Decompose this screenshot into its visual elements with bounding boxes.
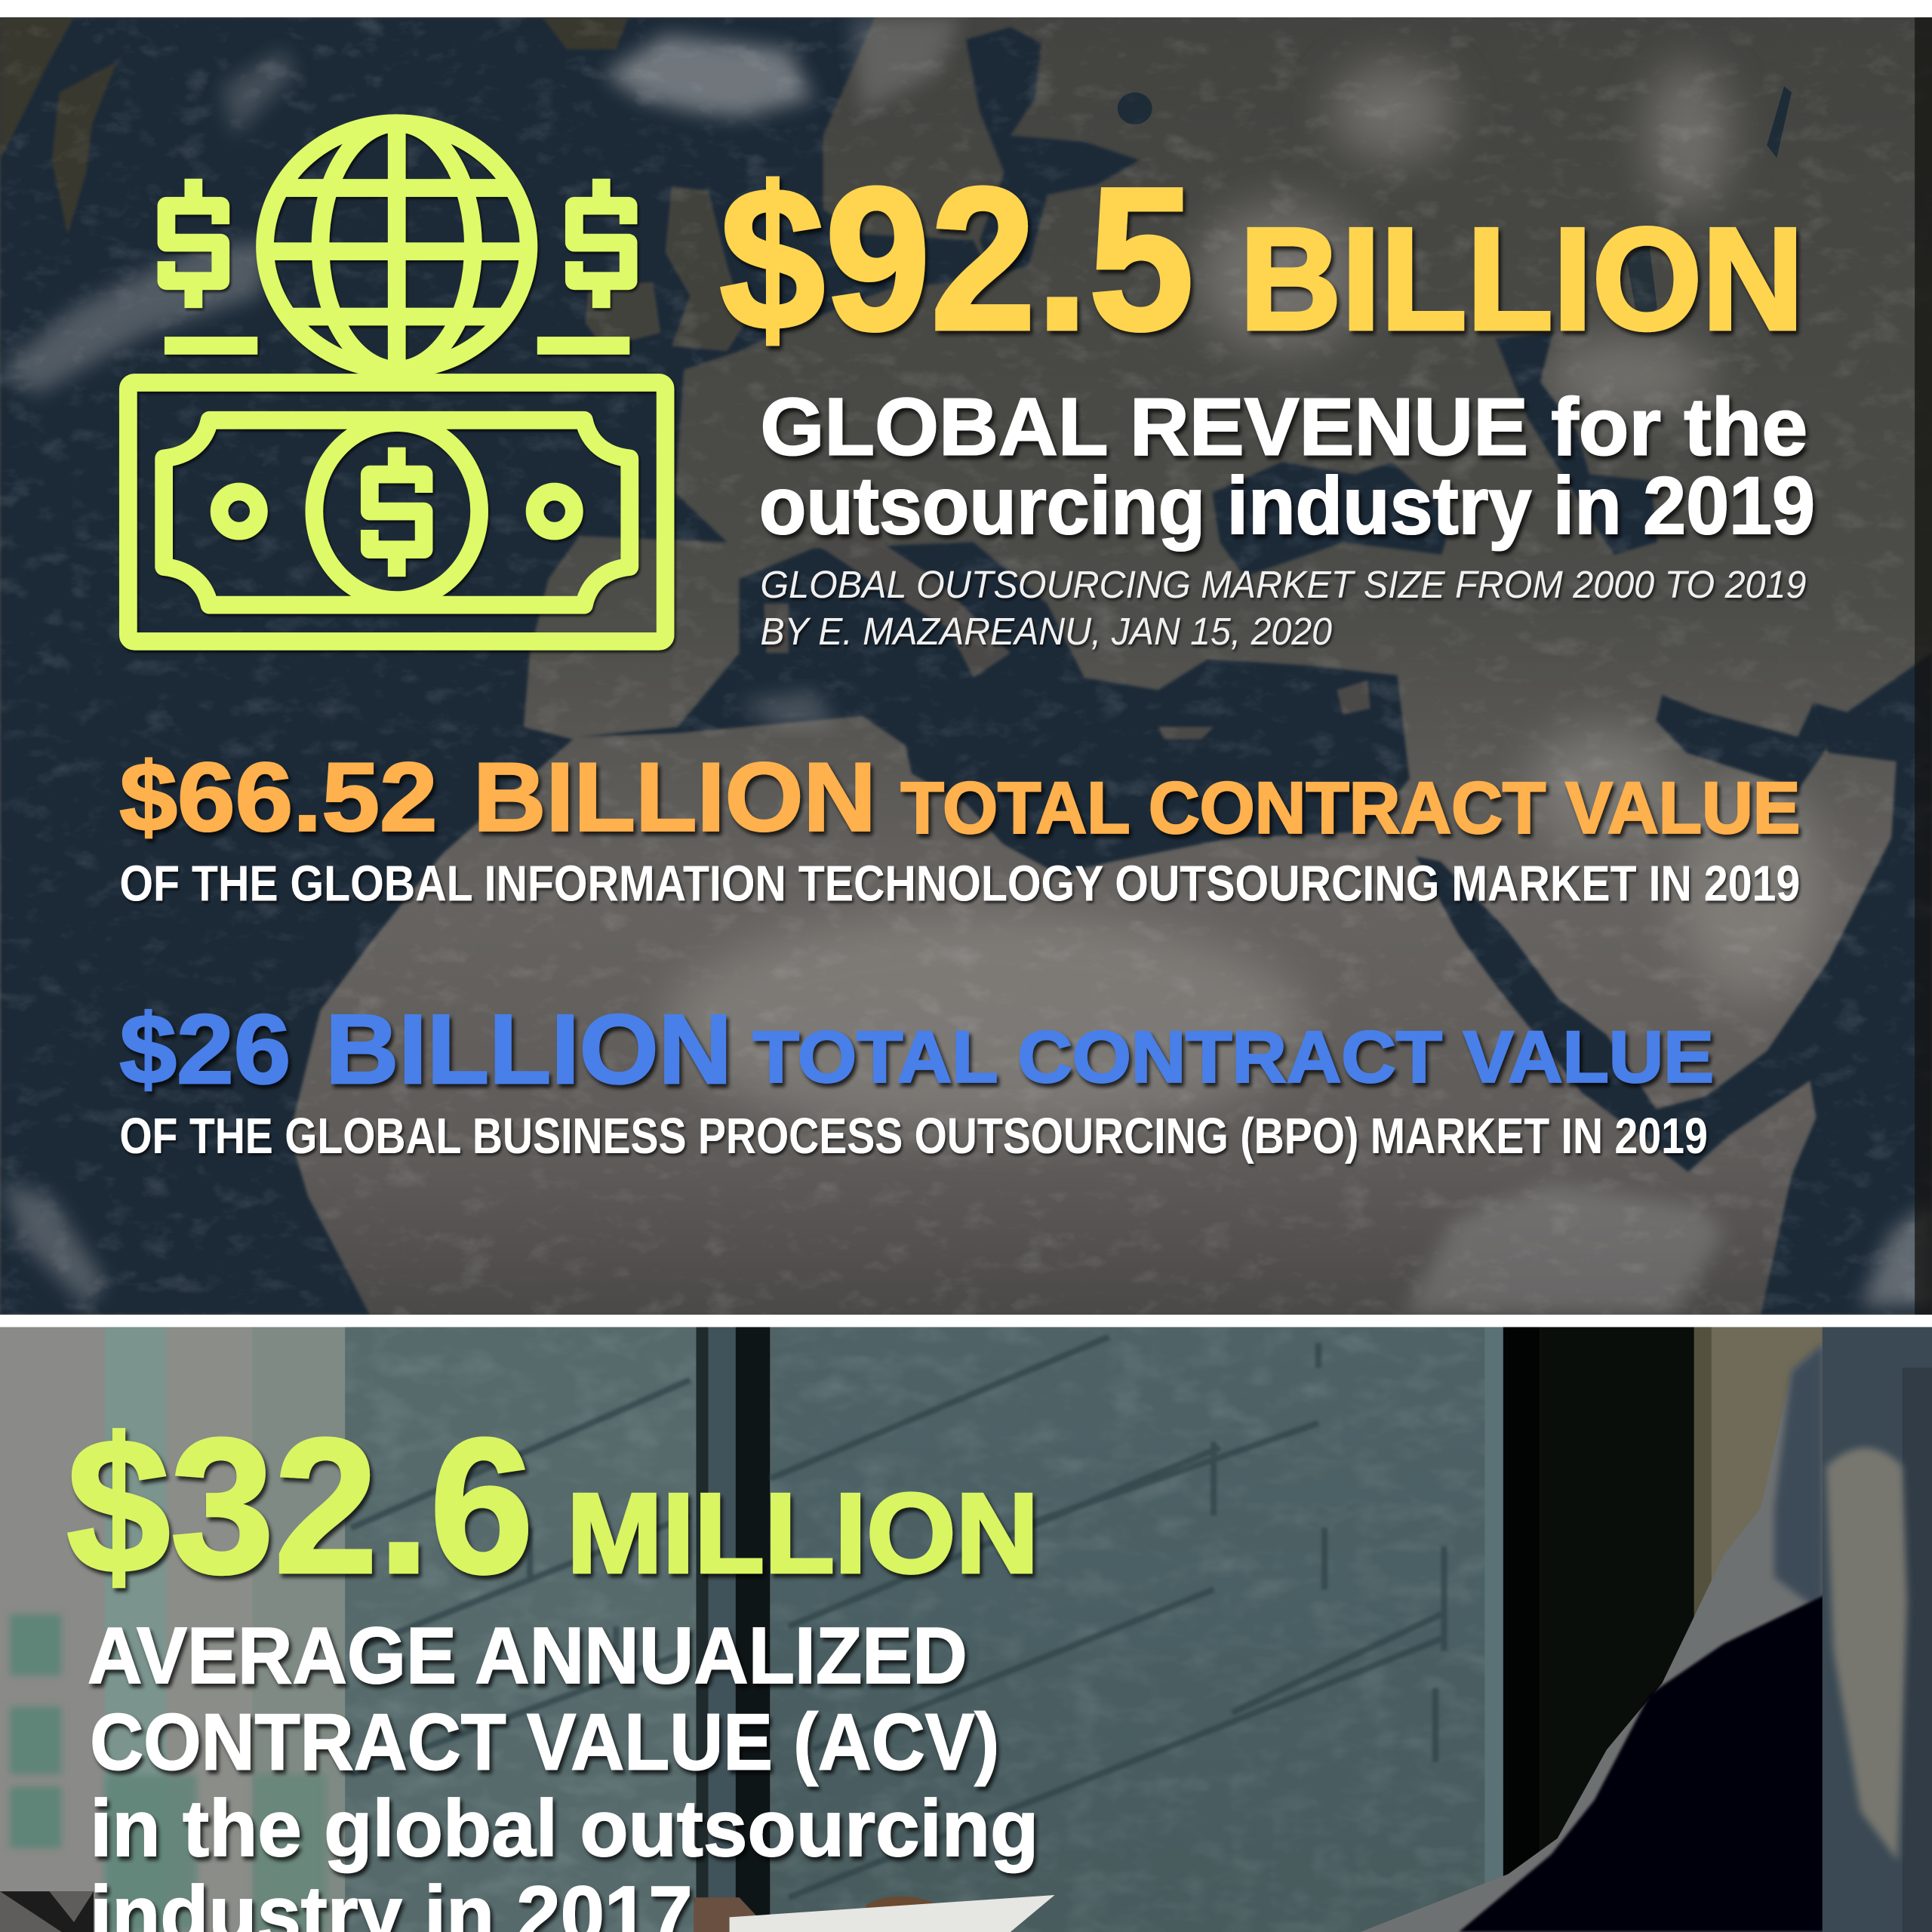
sea: Black Sea bbox=[1213, 462, 1453, 577]
sea: Baltic bbox=[966, 27, 1140, 277]
stat: 66.52 billion: TOTAL CONTRACT VALUE bbox=[900, 768, 1800, 849]
stat: 26 billion: TOTAL CONTRACT VALUE bbox=[753, 1017, 1714, 1097]
stat: 26 billion: BILLION bbox=[325, 994, 732, 1104]
sea: Indian Ocean and Red Sea bbox=[1416, 653, 1932, 1315]
text: global revenue description: GLOBAL REVENUE for the bbox=[760, 380, 1807, 472]
icon part: dashes bbox=[165, 340, 629, 351]
sea: Mediterranean bbox=[579, 542, 1410, 875]
land: Iceland and Greenland fragments bbox=[0, 17, 629, 234]
stat: 66.52 billion bbox=[119, 743, 1800, 851]
text: global revenue description bbox=[759, 380, 1815, 551]
icon part: banknote bbox=[164, 420, 629, 605]
icon part: outer note frame bbox=[128, 383, 666, 641]
panel: average contract value bbox=[0, 1327, 1932, 1932]
background: satellite map bbox=[0, 17, 1932, 1315]
brick courses bbox=[351, 1337, 1444, 1897]
stat: 32.6 million: MILLION bbox=[567, 1469, 1038, 1596]
icon: globe over banknote with dollar signs bbox=[128, 115, 666, 641]
land: Italy and islands bbox=[764, 530, 1371, 740]
text: global revenue description: outsourcing industry in 2019 bbox=[759, 460, 1815, 551]
icon part: globe bbox=[265, 115, 528, 374]
texture bbox=[0, 17, 1932, 1315]
background: office photo bbox=[0, 1327, 1932, 1932]
icon part: left dollar bbox=[166, 179, 220, 308]
icon part: right dot bbox=[535, 491, 574, 531]
sea: Persian Gulf bbox=[1656, 695, 1829, 789]
stat: 26 billion: $26 bbox=[119, 994, 291, 1104]
icon part: central medallion bbox=[314, 423, 479, 600]
sea: Atlantic and North Sea bbox=[0, 17, 992, 1315]
photo: paper and head at the bottom bbox=[0, 1891, 1055, 1932]
stat: 92.5 billion: BILLION bbox=[1239, 198, 1804, 360]
text: average annualized contract value description bbox=[88, 1611, 1038, 1932]
text: source citation: BY E. MAZAREANU, JAN 15, 2020 bbox=[760, 610, 1332, 653]
stat: 66.52 billion: $66.52 bbox=[119, 743, 438, 851]
icon part: left dot bbox=[220, 491, 259, 531]
text: average annualized contract value description: in the global outsourcing bbox=[90, 1784, 1038, 1873]
photo: person arm and jacket bbox=[1360, 1327, 1932, 1932]
stat: 26 billion bbox=[119, 994, 1714, 1104]
icon part: right dollar bbox=[574, 179, 629, 308]
text: source citation bbox=[760, 563, 1806, 653]
sea: Caspian bbox=[1496, 333, 1657, 555]
text: source citation: GLOBAL OUTSOURCING MARKET SIZE FROM 2000 TO 2019 bbox=[760, 563, 1806, 606]
clouds bbox=[0, 17, 1932, 1313]
text: average annualized contract value description: AVERAGE ANNUALIZED bbox=[88, 1611, 968, 1700]
text: average annualized contract value description: CONTRACT VALUE (ACV) bbox=[90, 1697, 999, 1786]
panel: global market figures bbox=[0, 17, 1932, 1315]
stat: 32.6 million: $32.6 bbox=[66, 1398, 534, 1613]
stat: 66.52 billion: BILLION bbox=[473, 743, 876, 851]
stat: 92.5 billion bbox=[719, 146, 1804, 373]
stat: 92.5 billion: $92.5 bbox=[719, 146, 1194, 373]
land: Great Britain and Ireland bbox=[586, 186, 746, 351]
icon part: central dollar bbox=[370, 448, 424, 577]
lakes bbox=[1118, 86, 1792, 327]
stat: 32.6 million bbox=[66, 1398, 1038, 1613]
